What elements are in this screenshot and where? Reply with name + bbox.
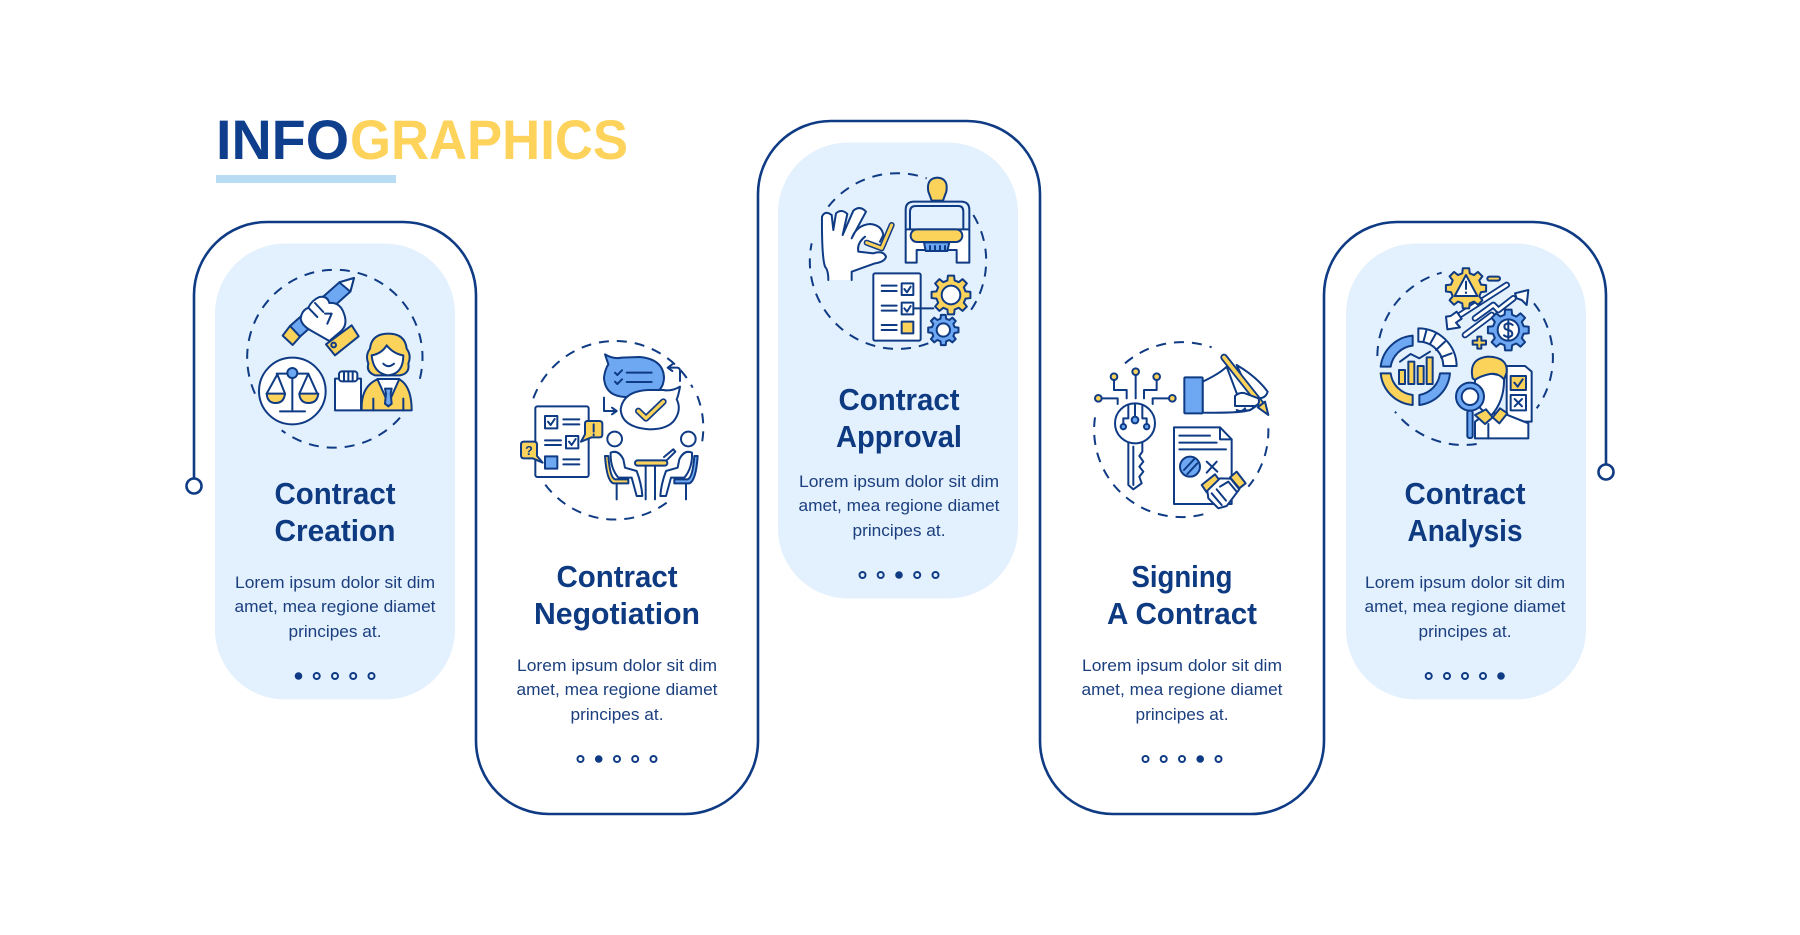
panel: contract approval <box>798 173 1000 579</box>
text block: contract analysis <box>1364 573 1566 641</box>
heading: contract analysis <box>1404 476 1526 548</box>
heading: contract negotiation <box>534 559 700 631</box>
heading: contract approval: Approval <box>836 419 962 454</box>
icon: contract negotiation: ? <box>525 444 533 458</box>
title <box>216 108 628 171</box>
text block: contract creation: amet, mea regione diamet <box>234 597 436 616</box>
heading: contract creation <box>274 476 396 548</box>
heading: contract creation: Creation <box>274 513 396 548</box>
text block: contract creation: Lorem ipsum dolor sit dim <box>235 573 435 592</box>
heading: contract approval: Contract <box>838 382 960 417</box>
step dots: 3 of 5 <box>860 571 938 579</box>
heading: contract negotiation: Contract <box>556 559 678 594</box>
text block: signing a contract: principes at. <box>1136 705 1228 724</box>
text block: contract negotiation: principes at. <box>570 705 664 724</box>
title: INFO <box>216 108 349 171</box>
text block: contract approval: principes at. <box>852 521 946 540</box>
icon: signing a contract <box>1094 342 1268 517</box>
text block: contract approval: Lorem ipsum dolor sit dim <box>799 472 999 491</box>
heading: signing a contract: A Contract <box>1107 596 1257 631</box>
icon: contract analysis <box>1377 268 1553 445</box>
heading: contract creation: Contract <box>274 476 396 511</box>
panel: light blue backgrounds <box>215 142 1586 700</box>
icon: contract approval <box>810 173 986 349</box>
panel: contract creation <box>234 270 436 680</box>
heading: contract negotiation: Negotiation <box>534 596 700 631</box>
text block: contract creation <box>234 573 436 641</box>
text block: contract approval <box>798 472 1000 540</box>
heading: contract analysis: Analysis <box>1408 513 1522 548</box>
text block: contract analysis: amet, mea regione diamet <box>1364 597 1566 616</box>
winding outline connector <box>186 121 1614 814</box>
heading: contract analysis: Contract <box>1404 476 1526 511</box>
step dots: 5 of 5 <box>1426 672 1505 680</box>
text block: contract creation: principes at. <box>288 622 382 641</box>
text block: contract negotiation: Lorem ipsum dolor sit dim <box>517 656 717 675</box>
step dots: 2 of 5 <box>578 755 656 763</box>
text block: contract approval: amet, mea regione diamet <box>798 496 1000 515</box>
text block: contract negotiation <box>516 656 718 724</box>
text block: signing a contract: amet, mea regione diamet <box>1082 680 1283 699</box>
icon: contract negotiation <box>521 341 703 520</box>
text block: signing a contract: Lorem ipsum dolor sit dim <box>1082 656 1282 675</box>
step dots: 4 of 5 <box>1142 755 1222 763</box>
step dots: 1 of 5 <box>295 672 374 680</box>
heading: signing a contract: Signing <box>1132 559 1232 594</box>
text block: contract analysis: Lorem ipsum dolor sit dim <box>1365 573 1565 592</box>
text block: signing a contract <box>1082 656 1283 724</box>
text block: contract negotiation: amet, mea regione diamet <box>516 680 718 699</box>
panel: contract negotiation <box>516 341 718 763</box>
panel: signing a contract <box>1082 342 1283 763</box>
text block: contract analysis: principes at. <box>1418 622 1512 641</box>
heading: signing a contract <box>1107 559 1257 631</box>
panel: contract analysis <box>1364 268 1566 680</box>
title underline <box>216 175 396 183</box>
heading: contract approval <box>836 382 962 454</box>
title: GRAPHICS <box>350 108 628 171</box>
icon: contract creation <box>247 270 423 448</box>
